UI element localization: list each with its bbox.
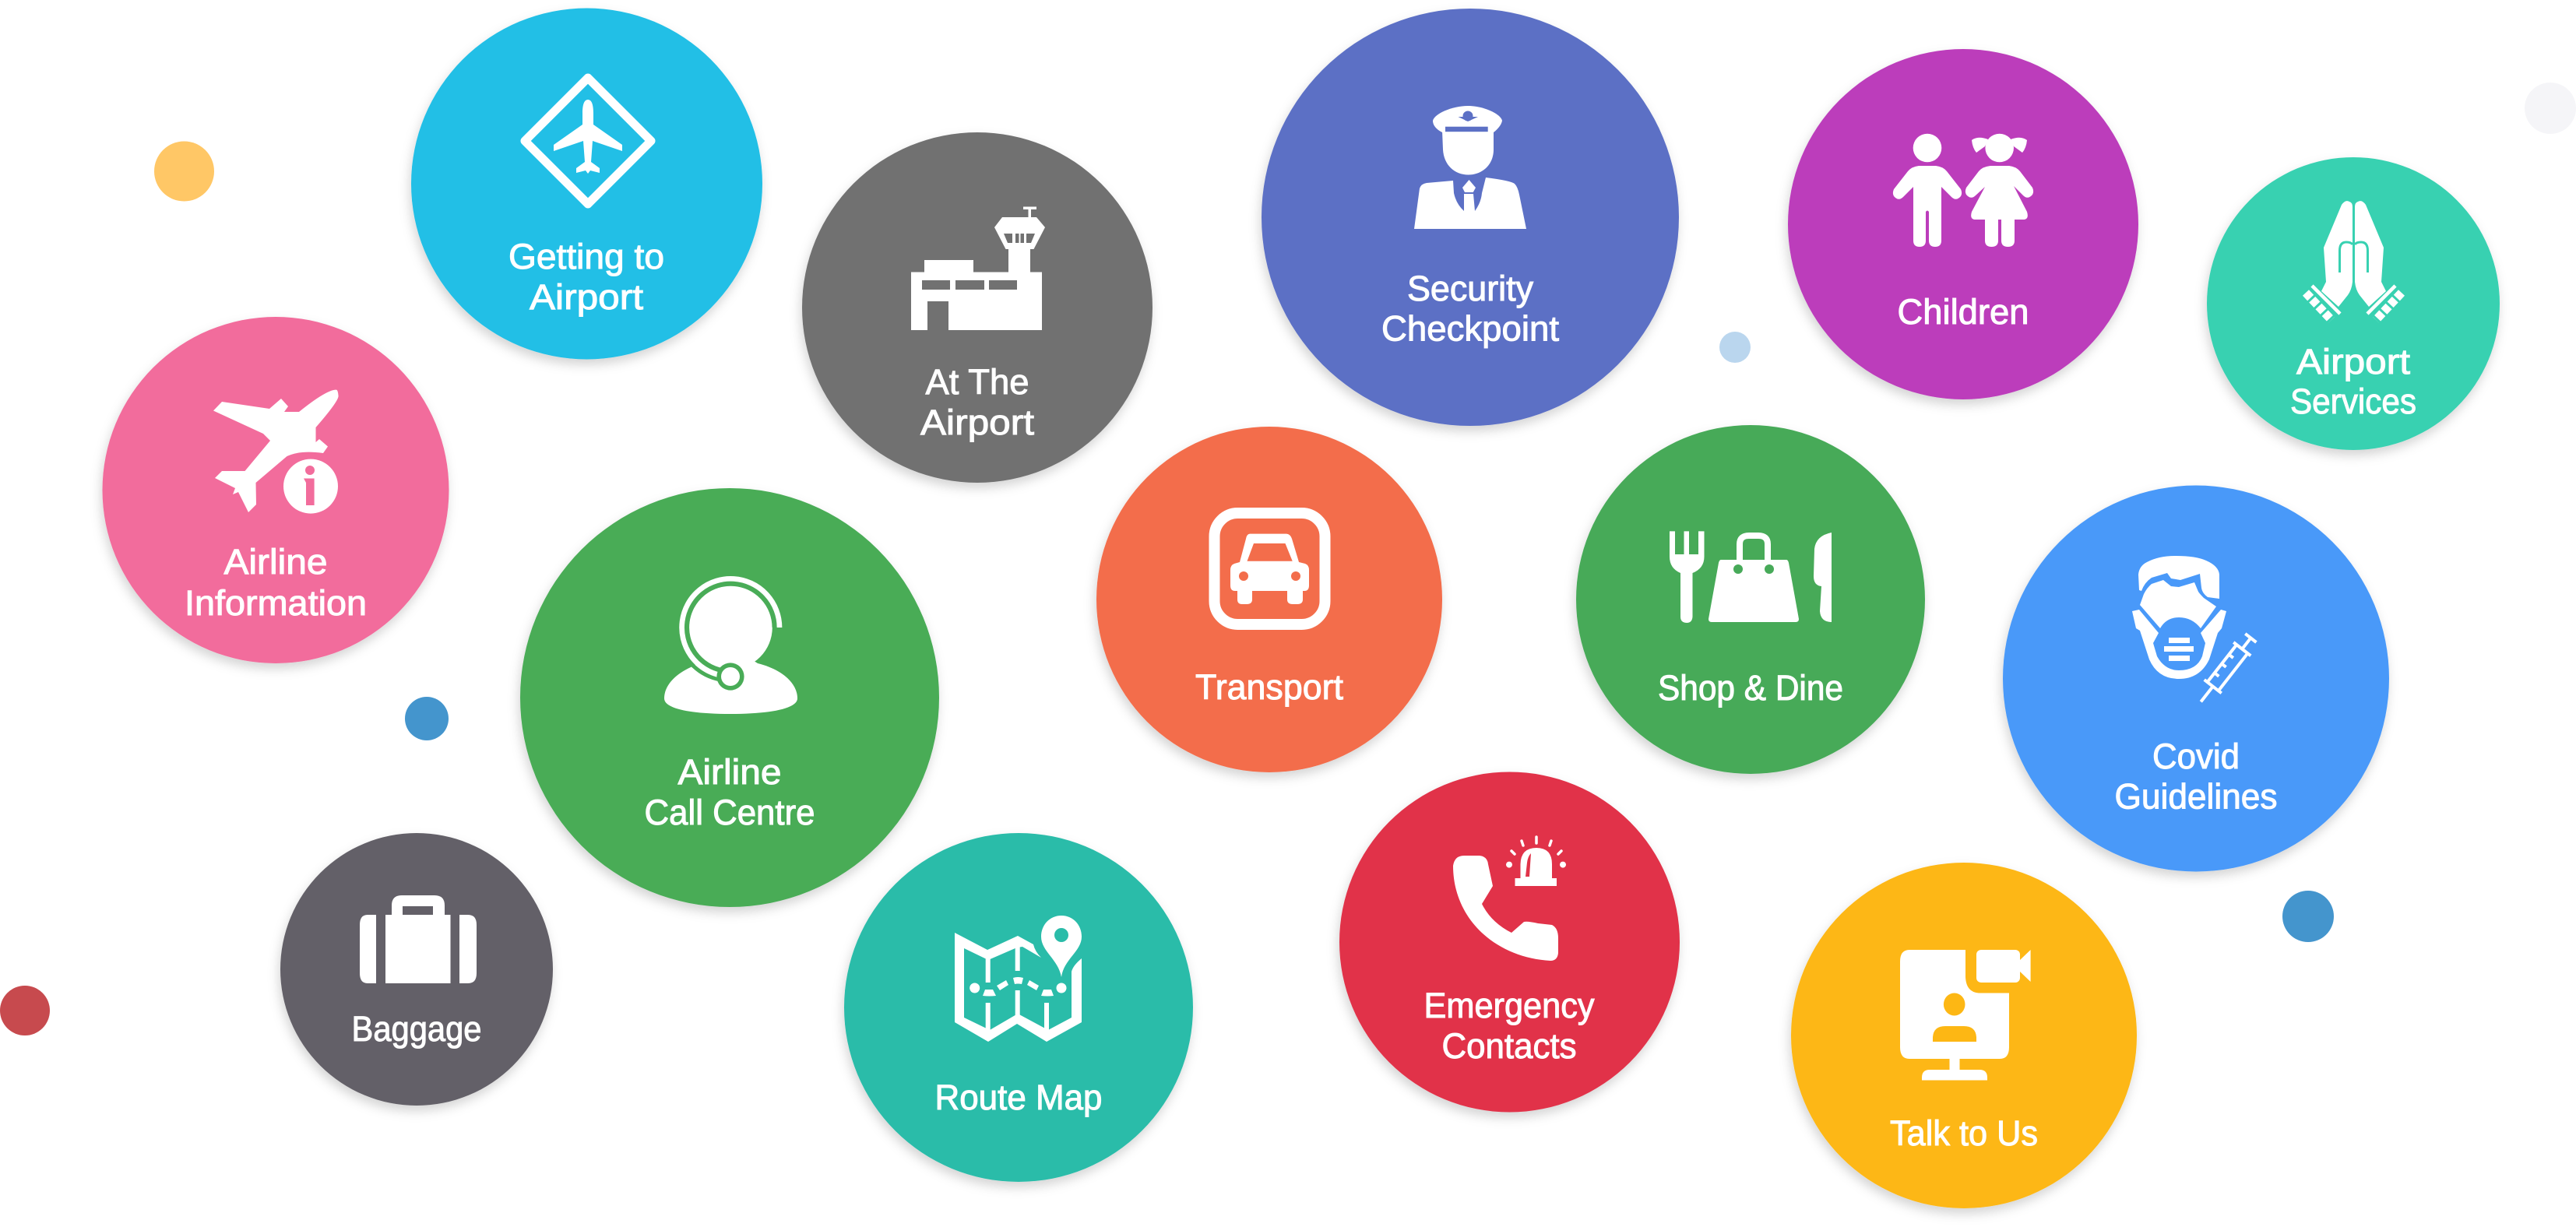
- label: [920, 362, 1035, 442]
- panel: Transport: [1096, 427, 1442, 772]
- icon: car in rounded square: [1215, 513, 1325, 624]
- icon: call centre agent with headset: [664, 578, 797, 714]
- label: Transport: [1195, 667, 1343, 707]
- panel: Airport Services: [2207, 157, 2500, 450]
- label: Airline: [224, 542, 327, 582]
- icon: boy and girl: [1893, 134, 2033, 247]
- panel: Emergency Contacts: [1339, 772, 1680, 1112]
- label: [1423, 986, 1595, 1066]
- panel: Shop & Dine: [1576, 425, 1925, 774]
- icon: plane with info badge: [213, 390, 339, 514]
- decorative dot: red: [0, 986, 50, 1035]
- label: Services: [2290, 381, 2416, 421]
- label: Shop & Dine: [1658, 668, 1843, 708]
- label: [185, 542, 367, 623]
- label: Children: [1897, 292, 2029, 332]
- icon: namaste hands: [2306, 201, 2402, 320]
- label: [645, 752, 815, 832]
- label: [1381, 269, 1559, 349]
- panel: Airline Information: [103, 317, 449, 663]
- decorative dot: yellow: [154, 142, 214, 201]
- label: Airport: [920, 403, 1035, 442]
- icon: folded map with pin: [955, 916, 1082, 1042]
- label: Security: [1407, 269, 1533, 308]
- icon: phone and siren: [1453, 837, 1566, 961]
- panel: At The Airport: [802, 132, 1153, 483]
- icon: fork, shopping bag and knife: [1670, 531, 1832, 623]
- label: Call Centre: [645, 793, 815, 832]
- panel: Security Checkpoint: [1262, 9, 1679, 426]
- decorative dot: pale grey: [2525, 83, 2576, 134]
- label: [2290, 342, 2416, 421]
- label: [509, 237, 664, 317]
- label: Information: [185, 583, 367, 623]
- label: [2115, 737, 2277, 816]
- label: Airport: [530, 277, 644, 317]
- label: Airport: [2296, 342, 2411, 381]
- icon: terminal and control tower: [911, 207, 1045, 330]
- label: Emergency: [1423, 986, 1595, 1025]
- panel: Baggage: [280, 833, 553, 1106]
- label: Contacts: [1442, 1026, 1576, 1066]
- label: Covid: [2152, 737, 2240, 776]
- panel: Route Map: [844, 833, 1193, 1182]
- label: Getting to: [509, 237, 664, 276]
- icon: plane in diamond: [525, 78, 651, 204]
- icon: suitcase: [360, 895, 477, 983]
- label: At The: [925, 362, 1029, 402]
- icon: masked face and syringe: [2132, 556, 2259, 708]
- decorative dot: blue left: [405, 697, 449, 740]
- label: Checkpoint: [1381, 308, 1559, 349]
- panel: Getting to Airport: [411, 8, 762, 360]
- panel: Talk to Us: [1791, 863, 2137, 1208]
- decorative dot: blue right: [2282, 891, 2334, 942]
- icon: video call monitor: [1900, 950, 2031, 1081]
- panel: Covid Guidelines: [2003, 486, 2389, 872]
- panel: Children: [1788, 49, 2138, 399]
- decorative dot: light blue: [1719, 332, 1751, 363]
- panel: Airline Call Centre: [520, 488, 939, 907]
- label: Baggage: [352, 1009, 481, 1049]
- label: Airline: [677, 752, 782, 792]
- label: Route Map: [934, 1078, 1103, 1117]
- label: Guidelines: [2115, 777, 2277, 816]
- icon: security officer: [1414, 106, 1526, 229]
- label: Talk to Us: [1890, 1113, 2038, 1153]
